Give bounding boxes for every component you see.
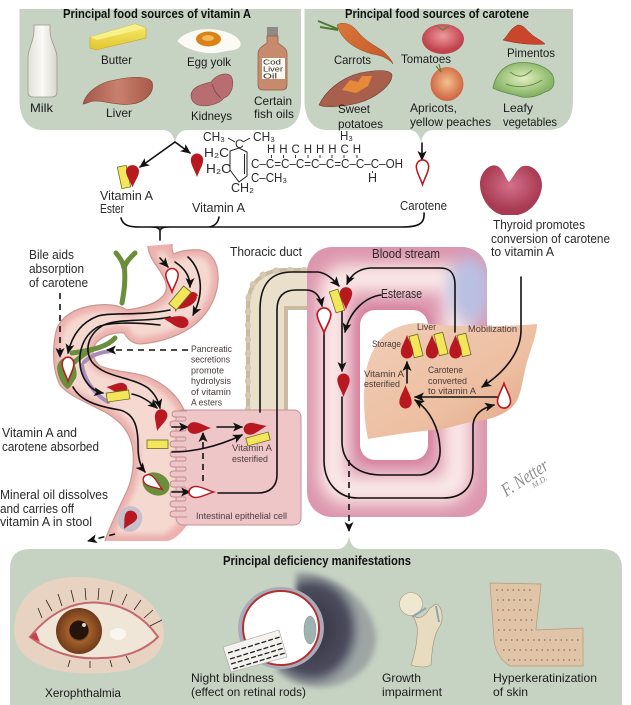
label: mobilization: Mobilization — [468, 324, 517, 335]
text: mineral oil — [0, 488, 108, 529]
illustration: night blindness eye — [191, 572, 376, 699]
vitamin A ester in duodenum — [106, 382, 130, 402]
label: vitamin A esterified in liver — [364, 369, 405, 390]
esterified vitamin A in cell — [243, 420, 270, 446]
thoracic duct tube — [248, 270, 325, 415]
circulation and liver pathway arrows — [324, 268, 521, 531]
icon: cod liver oil bottle: Liver — [263, 64, 284, 74]
bile duct — [68, 253, 135, 368]
illustration: night blindness eye: (effect on retinal rods) — [191, 685, 306, 699]
icon: leafy vegetables: Leafy — [503, 101, 533, 115]
icon: pimento — [503, 25, 555, 60]
panel: food sources of vitamin A — [20, 7, 301, 143]
text: thyroid promotes conversion: to vitamin A — [491, 245, 555, 259]
text: bile aids absorption: absorption — [29, 262, 84, 276]
panel: intestinal epithelial cell — [170, 410, 301, 525]
icon: vitamin A drop — [191, 154, 203, 177]
chemical formula of vitamin A: CH₃ — [203, 130, 225, 144]
icon: sweet potato: Sweet — [338, 102, 371, 116]
vitamin A near villi — [151, 408, 169, 433]
text: mineral oil: vitamin A in stool — [0, 515, 92, 529]
absorption pathway arrows — [60, 257, 339, 541]
label: intestinal epithelial cell: Intestinal epithelial cell — [196, 511, 287, 522]
carotene with bile in intestine — [139, 468, 173, 500]
circulating vitamin A and carotene icons — [317, 287, 352, 397]
chemical formula of vitamin A: C–C=C–C=C–C=C–C–C–OH — [251, 157, 403, 171]
icon: milk bottle: Milk — [30, 101, 54, 115]
chemical formula of vitamin A: H₃ — [340, 129, 353, 143]
label: thoracic duct: Thoracic duct — [230, 245, 303, 259]
label: blood stream: Blood stream — [372, 247, 440, 261]
text: pancreatic secretions: promote — [191, 366, 224, 376]
icon: egg yolk — [177, 29, 241, 69]
panel: principal deficiency manifestations — [10, 536, 622, 705]
text: vitamin A and carotene absorbed: Vitamin A and — [2, 426, 77, 440]
icon: kidneys — [191, 74, 233, 123]
text: bile aids absorption: Bile aids — [29, 248, 74, 262]
text: vitamin A and carotene absorbed — [2, 426, 99, 454]
chemical formula of vitamin A: C–CH₃ — [251, 171, 287, 185]
icon: tomato — [401, 24, 464, 66]
text: pancreatic secretions: secretions — [191, 354, 230, 366]
carotene with bile in duodenum — [57, 357, 77, 389]
illustration: femur growth impairment: Growth — [382, 671, 421, 685]
artist signature: M.D. — [529, 474, 549, 491]
text: thyroid promotes conversion — [491, 218, 610, 259]
icon: butter: Butter — [101, 53, 132, 67]
icon: apricot: yellow peaches — [410, 115, 491, 129]
label: carotene converted to vitamin A: Carotene — [428, 365, 463, 376]
illustration: hyperkeratinization of skin: of skin — [493, 685, 528, 699]
icon: liver: Liver — [106, 106, 132, 120]
text: bile aids absorption: of carotene — [29, 276, 88, 290]
icon: leafy vegetables: vegetables — [503, 115, 557, 129]
vitamin A in stomach — [162, 313, 190, 329]
illustration: femur growth impairment: impairment — [382, 685, 443, 699]
arrows from food panels to molecules — [140, 142, 422, 167]
chemical formula of vitamin A: H₂C — [204, 146, 229, 160]
icon: thyroid gland — [480, 165, 542, 215]
text: bile aids absorption — [29, 248, 88, 290]
blood stream ring — [307, 247, 487, 517]
icon: vitamin A in liver — [399, 385, 412, 408]
heading: deficiency manifestations: Principal deficiency manifestations — [223, 554, 411, 568]
illustration: night blindness eye: Night blindness — [191, 671, 274, 685]
label: vitamin A esterified in liver: Vitamin A — [364, 369, 405, 380]
heading: carotene sources: Principal food sources of carotene — [345, 7, 529, 21]
illustration: hyperkeratinization of skin: Hyperkeratinization — [493, 671, 597, 685]
icon: milk bottle — [28, 25, 57, 115]
label: vitamin A: Vitamin A — [192, 201, 246, 215]
text: thyroid promotes conversion: Thyroid promotes — [493, 218, 585, 232]
stored vitamin A ester icons — [401, 332, 471, 358]
label: storage: Storage — [372, 339, 401, 350]
chemical formula of vitamin A: H₂C — [206, 162, 231, 176]
label: vitamin A esterified in liver: esterified — [364, 379, 400, 390]
icon: tomato: Tomatoes — [401, 52, 451, 66]
pancreatic duct — [82, 351, 112, 402]
gastrointestinal tract — [54, 244, 218, 541]
icon: apricot: Apricots, — [410, 101, 457, 115]
label: carotene: Carotene — [400, 199, 447, 213]
carotene in stomach — [166, 268, 178, 292]
icon: cod liver oil bottle: Certain — [254, 94, 292, 108]
text: pancreatic secretions — [191, 344, 232, 408]
label: vitamin A esterified: Vitamin A — [232, 443, 273, 454]
icon: kidneys: Kidneys — [191, 109, 232, 123]
label: carotene converted to vitamin A — [428, 365, 477, 397]
text: pancreatic secretions: of vitamin — [191, 387, 231, 398]
label: vitamin A esterified — [232, 443, 273, 465]
chemical formula of vitamin A: H H C H H H C H — [267, 144, 361, 156]
vitamin A ester in stomach — [169, 286, 198, 312]
icon: leafy vegetables — [493, 62, 557, 129]
label: carotene converted to vitamin A: to vitamin A — [428, 386, 477, 397]
label: vitamin A ester: Vitamin A — [100, 189, 154, 203]
icon: cod liver oil bottle: Cod — [263, 58, 281, 66]
icon: carrot: Carrots — [334, 53, 371, 67]
icon: apricot — [410, 64, 491, 129]
illustration: hyperkeratinization of skin — [490, 583, 597, 699]
heading: vitamin A sources: Principal food sources of vitamin A — [63, 7, 251, 21]
icon: sweet potato: potatoes — [338, 117, 383, 131]
chemical formula of vitamin A: H — [368, 171, 377, 185]
text: pancreatic secretions: A esters — [191, 398, 222, 408]
fatty acid block — [147, 440, 168, 448]
icon: carotene in liver — [498, 383, 510, 408]
icon: carrot — [318, 21, 393, 67]
label: esterase: Esterase — [381, 287, 422, 301]
icon: liver — [83, 77, 153, 120]
chemical formula of vitamin A — [203, 129, 403, 195]
icon: cod liver oil bottle — [254, 27, 294, 121]
carotene in cell — [189, 486, 214, 498]
vitamin A in cell — [188, 422, 211, 434]
panel: food sources of carotene — [304, 7, 573, 143]
icon: butter — [90, 24, 146, 67]
label: vitamin A ester: Ester — [100, 202, 124, 216]
icon: vitamin A ester — [117, 165, 139, 189]
label: vitamin A ester — [100, 189, 154, 216]
label: vitamin A esterified: esterified — [232, 454, 268, 465]
icon: cod liver oil bottle: fish oils — [254, 107, 294, 121]
text: pancreatic secretions: hydrolysis — [191, 376, 231, 387]
chemical formula of vitamin A: C — [235, 137, 244, 151]
liver — [364, 322, 537, 439]
illustration: femur growth impairment — [382, 592, 443, 699]
icon: egg yolk: Egg yolk — [187, 55, 232, 69]
artist signature — [497, 455, 556, 506]
icon: sweet potato — [319, 71, 392, 131]
vitamin A lost in stool — [113, 502, 147, 536]
icon: cod liver oil bottle: Oil — [263, 72, 278, 80]
illustration: xerophthalmia eye: Xerophthalmia — [45, 686, 121, 700]
brace joining absorbed forms — [121, 213, 424, 240]
illustration: xerophthalmia eye — [14, 577, 164, 700]
label: carotene converted to vitamin A: converted — [428, 376, 467, 387]
chemical formula of vitamin A: CH₃ — [253, 130, 275, 144]
artist signature: F. Netter — [497, 455, 553, 502]
chemical formula of vitamin A: CH₂ — [231, 181, 254, 195]
text: vitamin A and carotene absorbed: carotene absorbed — [2, 440, 99, 454]
icon: pimento: Pimentos — [507, 46, 555, 60]
text: mineral oil: Mineral oil dissolves — [0, 488, 108, 502]
text: thyroid promotes conversion: conversion of carotene — [491, 232, 610, 246]
stomach and intestine icons — [57, 268, 270, 536]
icon: carotene drop — [416, 160, 429, 185]
label: liver: Liver — [417, 322, 436, 333]
text: pancreatic secretions: Pancreatic — [191, 344, 232, 355]
text: mineral oil: and carries off — [0, 502, 74, 516]
